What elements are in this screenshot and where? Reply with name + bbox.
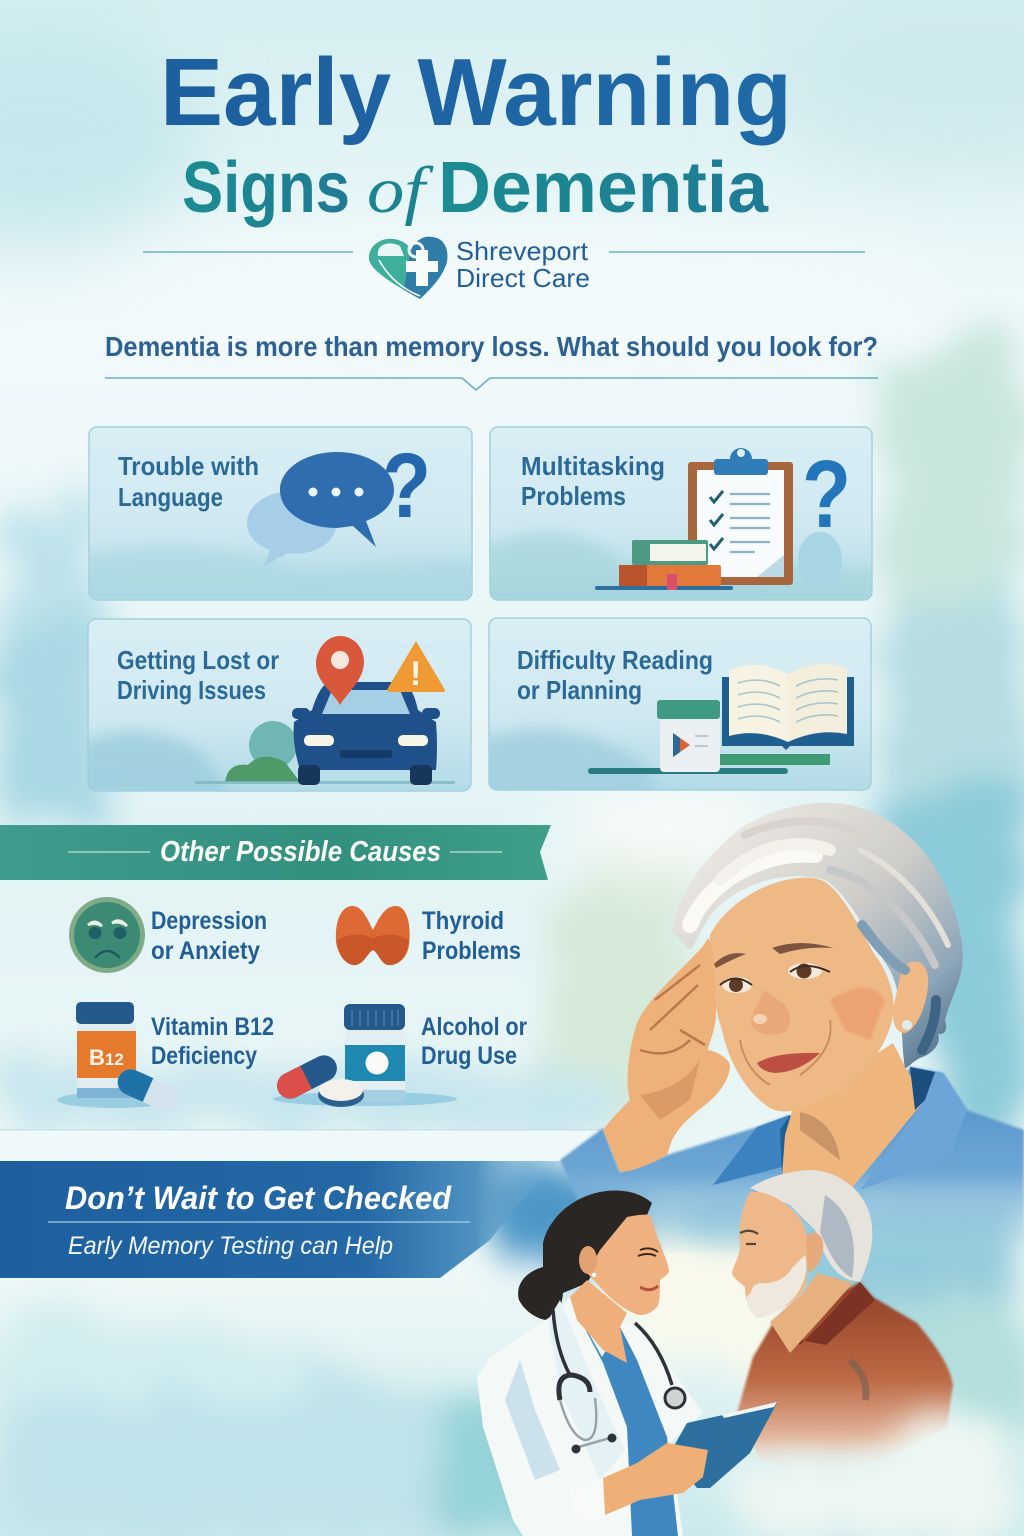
icon: speech bubbles (247, 435, 431, 566)
banner: Don't Wait to Get Checked: Early Memory Testing can Help (68, 1232, 393, 1260)
ear (893, 962, 928, 1033)
older man (732, 1170, 953, 1477)
banner: Don't Wait to Get Checked: Don’t Wait to Get Checked (65, 1180, 452, 1216)
doctor's cuff and hand (570, 1478, 605, 1523)
icon: car, map pin and warning (195, 636, 455, 785)
banner: Other Possible Causes: Other Possible Causes (160, 836, 441, 868)
cause: Depression or Anxiety: or Anxiety (151, 937, 260, 965)
icon: car, map pin and warning: ! (410, 655, 421, 693)
neck (782, 1043, 925, 1190)
question heading (105, 331, 878, 390)
cause: Alcohol or Drug Use (273, 1004, 527, 1107)
icon: speech bubbles: ? (382, 435, 431, 537)
cause: Vitamin B12 Deficiency: Deficiency (151, 1042, 257, 1070)
watercolor fade below man (740, 1415, 1024, 1536)
cause: Thyroid Problems: Problems (422, 937, 521, 965)
title: Early Warning (160, 39, 792, 146)
cause: Alcohol or Drug Use: Alcohol or (421, 1013, 527, 1041)
right collar (860, 1067, 967, 1190)
question heading: Dementia is more than memory loss. What should you look for? (105, 331, 878, 362)
label: Multitasking (521, 451, 665, 481)
icon: B12 bottle and capsule (57, 1002, 183, 1115)
doctor (477, 1190, 777, 1536)
hand and arm (603, 938, 730, 1172)
left collar (713, 1115, 800, 1185)
icon: pill bottle and pills (273, 1004, 457, 1107)
cause: Vitamin B12 Deficiency (57, 1002, 274, 1115)
tablet (670, 1403, 777, 1488)
cause: Thyroid Problems: Thyroid (422, 907, 504, 935)
doctor's neck (570, 1280, 627, 1363)
icon: clipboard and books (595, 441, 851, 590)
panel: Multitasking Problems (480, 427, 880, 610)
label: Getting Lost or (117, 645, 279, 675)
shirt shadow (780, 1115, 800, 1180)
cause: Vitamin B12 Deficiency: Vitamin B12 (151, 1013, 274, 1041)
title: Dementia (438, 148, 769, 228)
man's beard (747, 1255, 806, 1318)
illustration: doctor with older man (477, 1170, 1024, 1536)
panel: Difficulty Reading or Planning (480, 618, 871, 795)
cause: Depression or Anxiety (69, 897, 267, 973)
doctor's hair back (518, 1190, 652, 1320)
label: Problems (521, 481, 626, 511)
logo: Shreveport Direct Care: Shreveport (456, 236, 589, 266)
icon: thyroid (336, 906, 410, 965)
man's ear (806, 1233, 823, 1272)
title (160, 39, 792, 228)
panel: Getting Lost or Driving Issues (80, 619, 471, 795)
icon: B12 bottle and capsule: B12 (89, 1045, 124, 1070)
panel: Trouble with Language (80, 427, 480, 610)
icon: heart with cross (369, 237, 447, 299)
banner: Other Possible Causes (0, 825, 551, 880)
cause: Thyroid Problems (336, 906, 521, 965)
face (710, 878, 894, 1112)
title: of (367, 154, 434, 227)
label: or Planning (517, 675, 642, 705)
label: Difficulty Reading (517, 645, 713, 675)
logo: Shreveport Direct Care (143, 236, 865, 299)
doctor's face (587, 1215, 669, 1315)
stethoscope (553, 1310, 685, 1453)
icon: clipboard and books: ? (802, 441, 851, 548)
cause: Depression or Anxiety: Depression (151, 907, 267, 935)
man's hair (750, 1170, 872, 1282)
banner: Don't Wait to Get Checked (0, 1161, 560, 1278)
hair (672, 803, 963, 1068)
man's shirt (737, 1282, 953, 1477)
label: Trouble with (118, 451, 259, 481)
doctor's blue shirt (570, 1300, 678, 1536)
man's neck (770, 1273, 853, 1353)
doctor's ear (579, 1246, 597, 1274)
title: Signs (182, 148, 350, 228)
logo: Shreveport Direct Care: Direct Care (456, 263, 590, 293)
cause: Alcohol or Drug Use: Drug Use (421, 1042, 517, 1070)
hair strands (690, 821, 948, 1050)
icon: sad face (69, 897, 145, 973)
illustration: worried older woman (560, 803, 1024, 1260)
man's face (732, 1192, 808, 1317)
doctor's coat (477, 1297, 703, 1536)
icon: book and jar (588, 664, 854, 774)
shirt (560, 1067, 1024, 1260)
label: Driving Issues (117, 675, 266, 705)
label: Language (118, 482, 223, 512)
facial features (714, 943, 833, 1085)
